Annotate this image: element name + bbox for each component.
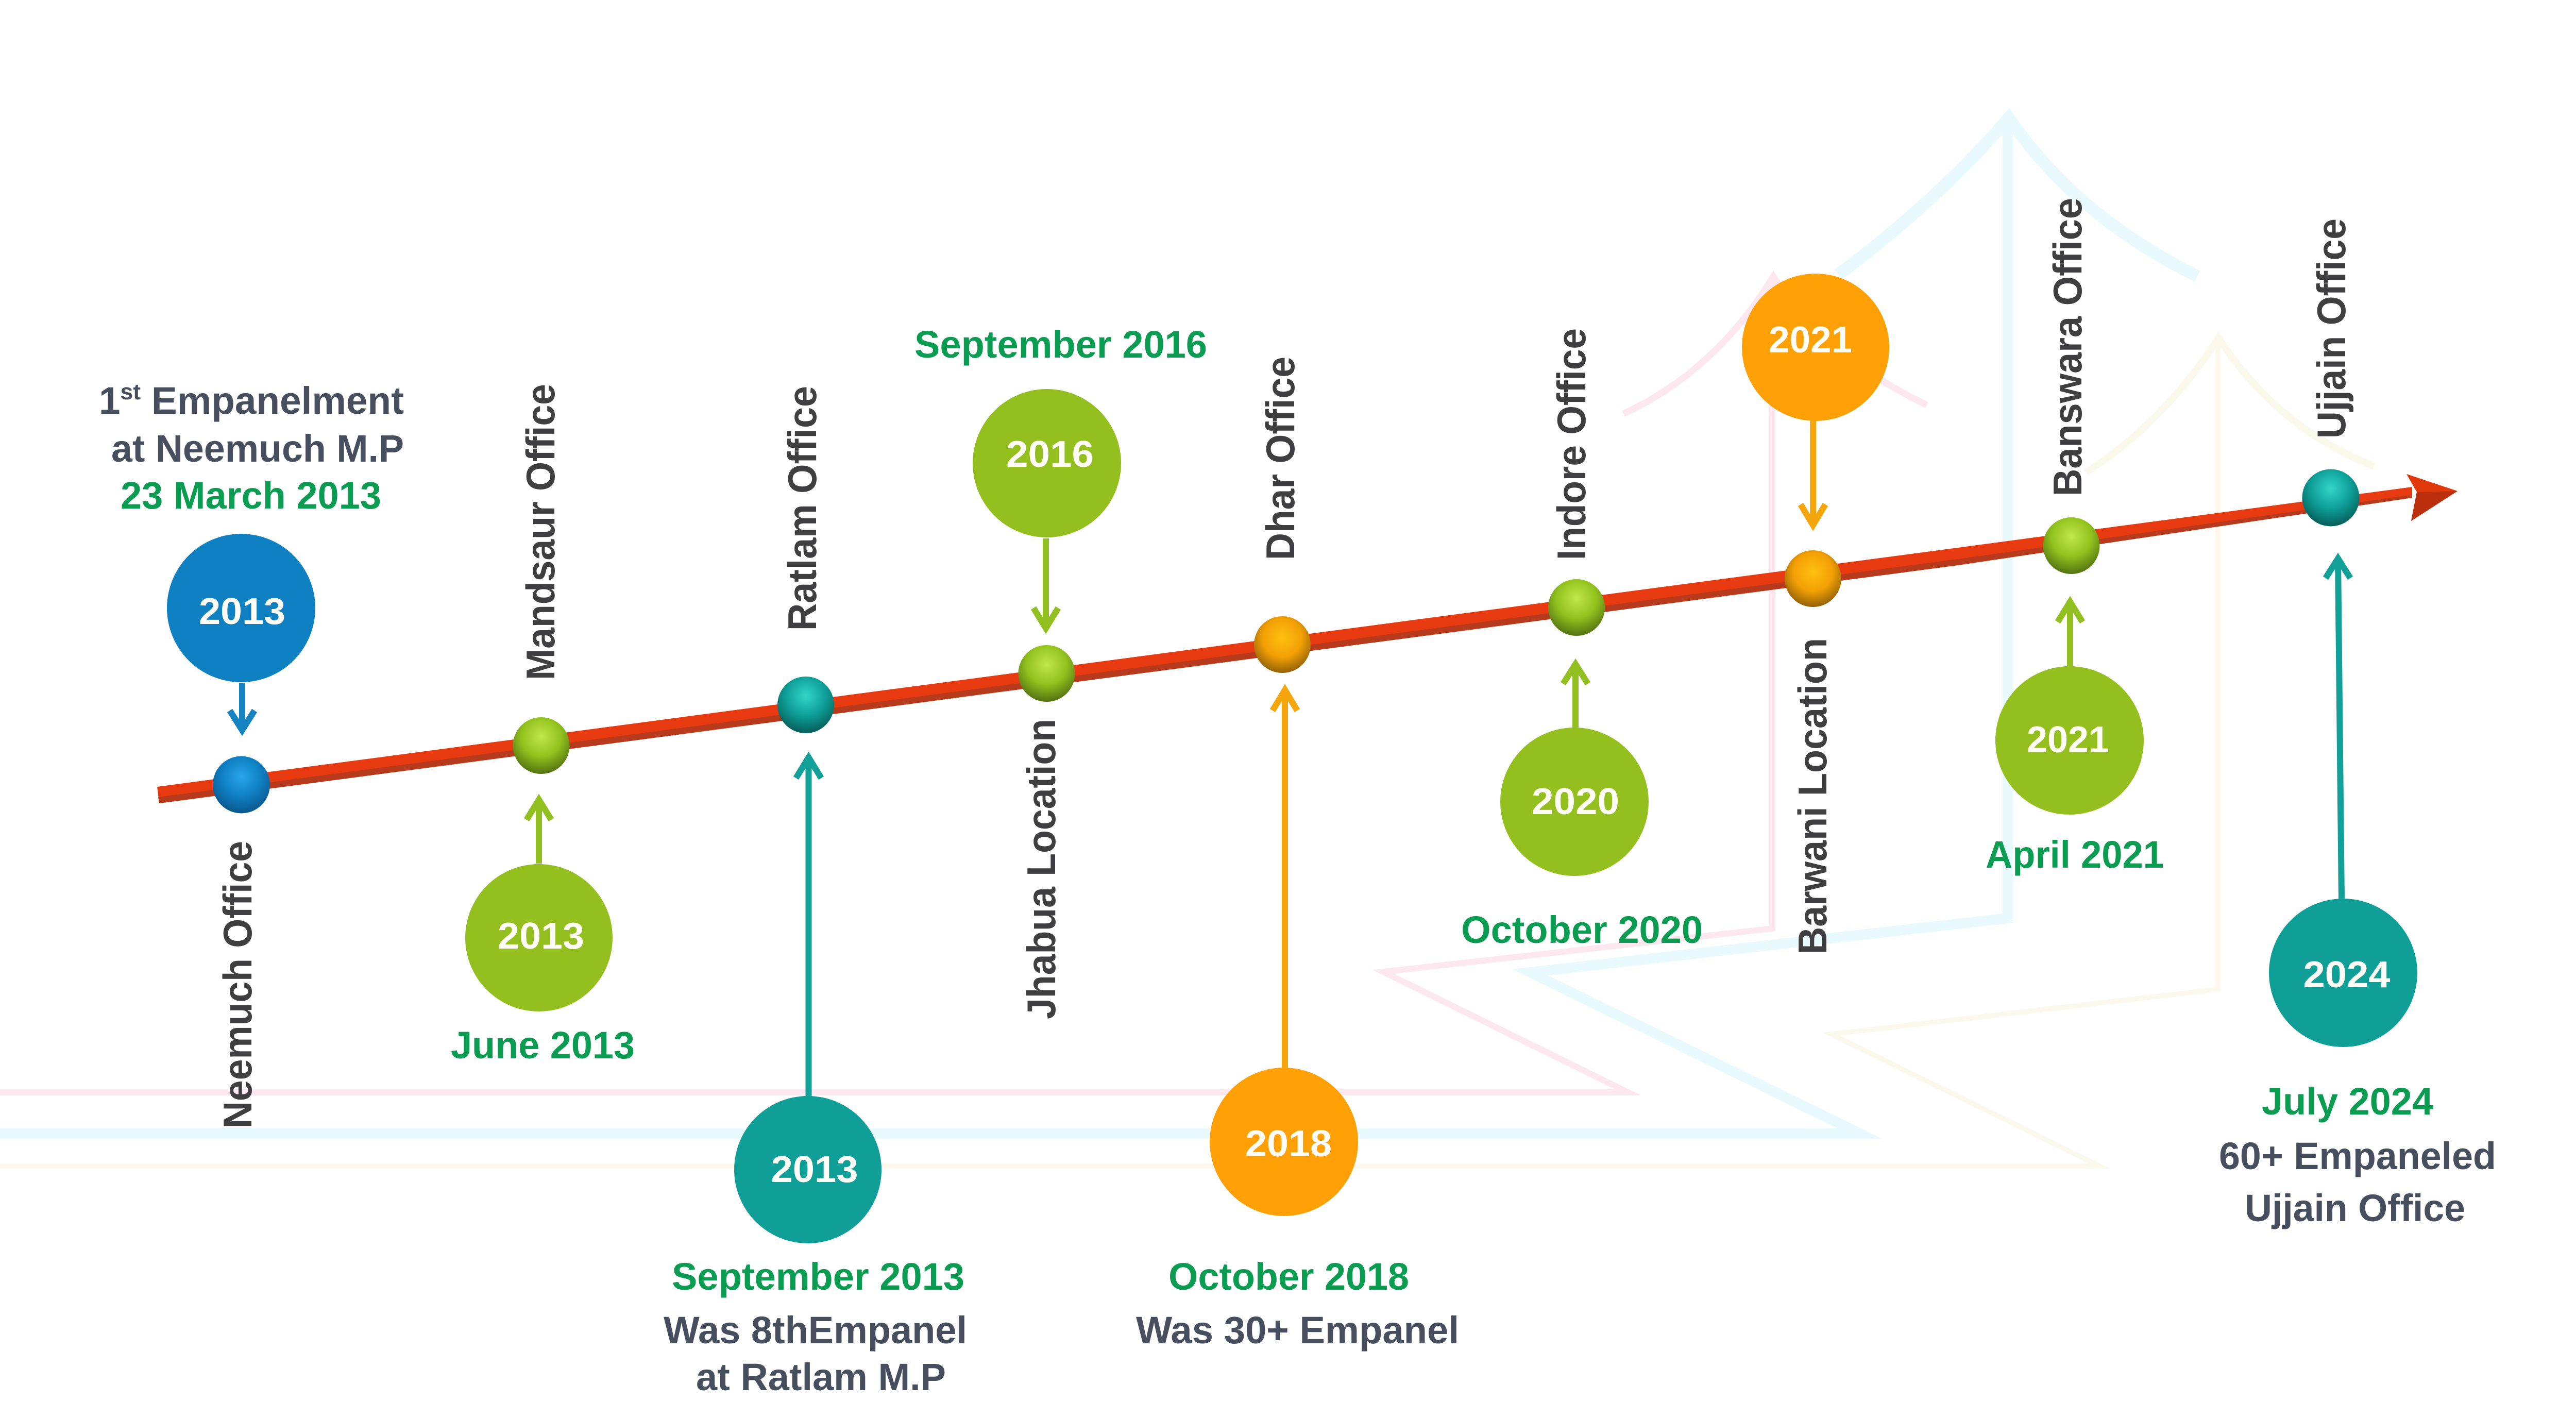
milestone: Barwani 2021 <box>1742 274 1889 954</box>
milestone: Neemuch 2013 <box>99 379 404 1128</box>
year circle <box>2269 899 2417 1047</box>
ghost arrow: pale yellow <box>0 338 2374 1166</box>
milestone: Dhar 2018 <box>1136 357 1459 1352</box>
arrow <box>1801 420 1825 525</box>
year circle: 2024 <box>2303 954 2391 995</box>
node <box>2043 517 2100 574</box>
timeline arrow <box>157 474 2458 803</box>
arrow <box>230 683 255 730</box>
milestone: Ratlam 2013 <box>664 386 967 1398</box>
date: October 2020 <box>1461 908 1703 951</box>
year circle <box>1742 274 1889 421</box>
label: Banswara Office <box>2045 198 2090 496</box>
caption: September 2013 <box>672 1255 964 1298</box>
node <box>1785 550 1841 607</box>
caption: first empanelment <box>99 379 404 517</box>
milestone: Mandsaur 2013 <box>451 384 635 1067</box>
node <box>513 717 570 774</box>
caption <box>1136 1255 1459 1352</box>
caption: first empanelment: 1 <box>99 379 120 422</box>
caption: Was 8thEmpanel <box>664 1309 967 1352</box>
caption: 60+ Empaneled <box>2219 1135 2496 1177</box>
node <box>1254 616 1311 673</box>
caption: October 2018 <box>1168 1255 1409 1298</box>
caption <box>2219 1080 2496 1229</box>
node <box>213 756 270 813</box>
arrow <box>1563 664 1588 728</box>
date: April 2021 <box>1986 833 2164 876</box>
year circle: 2013 <box>199 591 285 632</box>
label: Ratlam Office <box>779 386 825 631</box>
caption: first empanelment: at Neemuch M.P <box>111 427 404 470</box>
year circle: 2013 <box>498 916 584 957</box>
arrow <box>2058 602 2082 667</box>
label: Mandsaur Office <box>518 384 563 680</box>
year circle: 2013 <box>771 1149 858 1190</box>
milestone: Banswara 2021 <box>1986 198 2164 876</box>
node <box>777 677 834 733</box>
caption <box>664 1255 967 1398</box>
arrow <box>1033 538 1058 628</box>
caption: at Ratlam M.P <box>696 1356 946 1398</box>
date: June 2013 <box>451 1024 635 1067</box>
caption: first empanelment: 23 March 2013 <box>121 474 381 517</box>
year circle: 2016 <box>1006 434 1094 475</box>
arrow <box>527 800 551 864</box>
caption: first empanelment: st <box>121 379 141 404</box>
caption: Was 30+ Empanel <box>1136 1309 1459 1352</box>
year circle: 2018 <box>1245 1123 1332 1164</box>
label: Jhabua Location <box>1019 719 1064 1019</box>
date: September 2016 <box>914 323 1207 366</box>
ghost arrow: pink <box>0 277 1927 1092</box>
node <box>1548 579 1605 636</box>
caption: Ujjain Office <box>2245 1187 2465 1229</box>
year circle <box>734 1096 882 1243</box>
caption: July 2024 <box>2262 1080 2433 1123</box>
year circle: 2021 <box>1769 319 1852 361</box>
year circle <box>167 534 315 682</box>
milestone: Indore 2020 <box>1461 328 1703 951</box>
node <box>2302 469 2360 527</box>
milestone: Ujjain 2024 <box>2219 218 2496 1229</box>
year circle <box>1995 666 2144 815</box>
caption: first empanelment: Empanelment <box>141 379 404 422</box>
ghost arrow: light blue <box>0 118 2197 1134</box>
year circle <box>465 864 613 1011</box>
label: Indore Office <box>1549 328 1594 560</box>
arrow <box>796 757 821 1096</box>
background: ghost arrows <box>0 118 2374 1166</box>
milestone: Jhabua 2016 <box>914 323 1207 1019</box>
year circle: 2021 <box>2027 719 2109 761</box>
arrow <box>2326 559 2350 899</box>
arrow <box>1273 690 1297 1068</box>
year circle <box>1500 728 1649 876</box>
year circle <box>973 389 1121 537</box>
label: Ujjain Office <box>2309 218 2354 438</box>
year circle: 2020 <box>1532 781 1619 822</box>
label: Neemuch Office <box>215 841 260 1128</box>
year circle <box>1210 1068 1358 1216</box>
label: Dhar Office <box>1258 357 1303 560</box>
node <box>1018 645 1075 702</box>
label: Barwani Location <box>1790 638 1835 954</box>
